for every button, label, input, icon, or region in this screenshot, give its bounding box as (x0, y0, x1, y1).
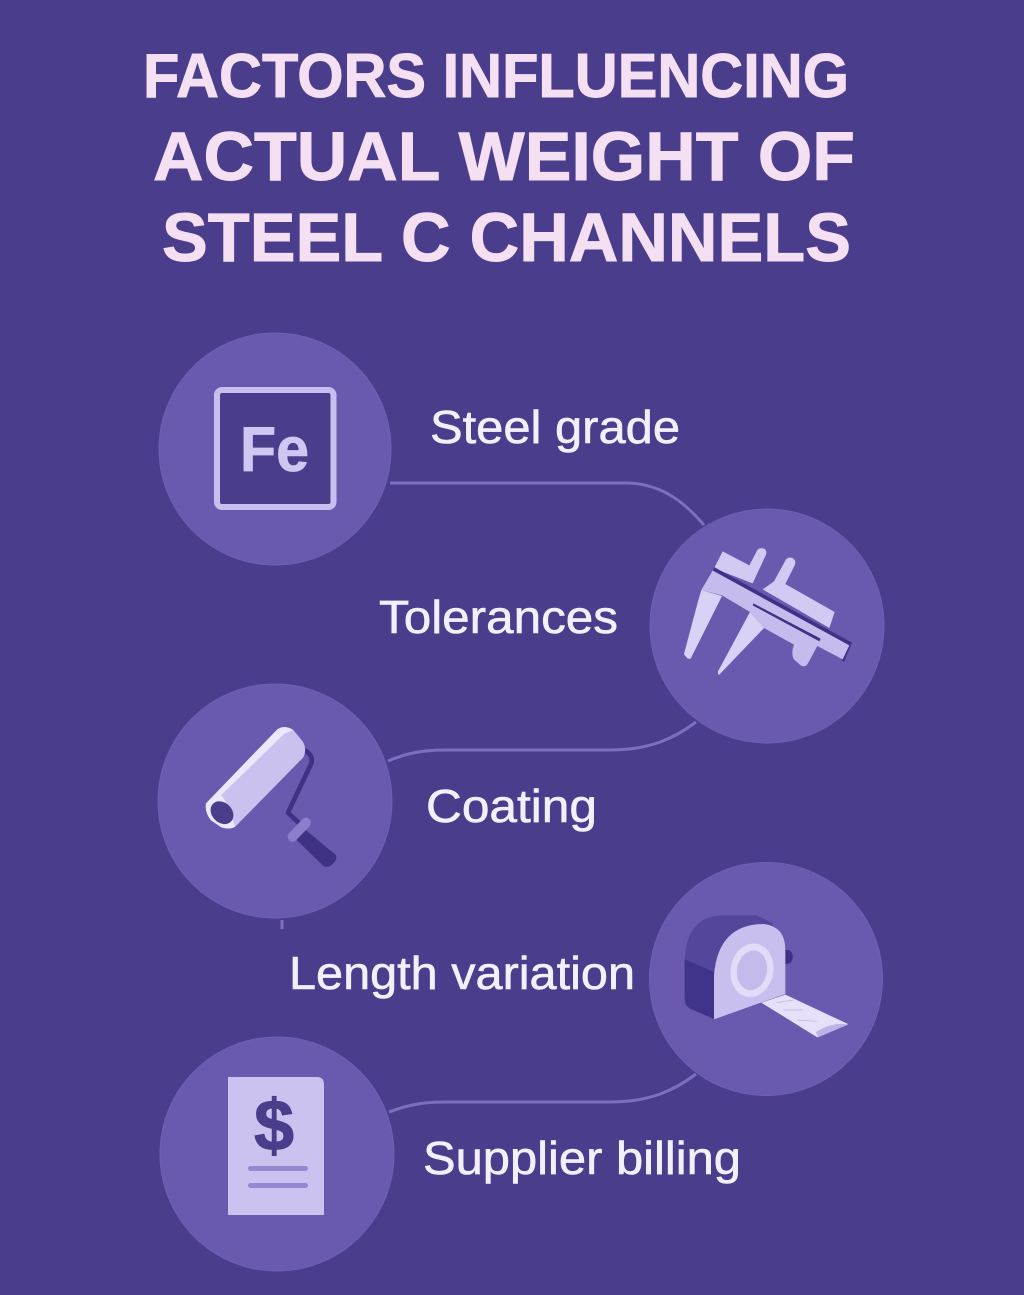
panel: tolerances (379, 509, 884, 743)
label: supplier billing: Supplier billing (423, 1132, 741, 1184)
circle: steel grade (159, 333, 391, 565)
title: ACTUAL WEIGHT OF (153, 118, 855, 195)
title: FACTORS INFLUENCING (143, 42, 849, 111)
panel: coating (158, 684, 597, 918)
circle: length variation (650, 862, 882, 1096)
label: length variation: Length variation (289, 947, 635, 999)
icon: paint roller (206, 727, 336, 867)
panel: length variation (289, 862, 882, 1096)
icon: Fe element box: Fe (240, 415, 309, 485)
label: tolerances: Tolerances (379, 591, 618, 643)
icon: invoice document (228, 1077, 324, 1215)
connector: length variation to supplier billing (389, 1074, 696, 1112)
circle: supplier billing (160, 1037, 394, 1271)
connector: tolerances to coating (388, 722, 696, 761)
label: coating: Coating (426, 780, 597, 832)
icon: invoice document: $ (254, 1086, 294, 1166)
tick below coating circle (280, 920, 284, 929)
icon: caliper (684, 548, 852, 675)
circle: coating (158, 684, 392, 918)
panel: steel grade (159, 333, 680, 565)
label: steel grade: Steel grade (430, 401, 680, 453)
icon: tape measure (685, 915, 848, 1037)
circle: tolerances (650, 509, 884, 743)
icon: Fe element box (217, 390, 334, 507)
title (143, 42, 855, 276)
title: STEEL C CHANNELS (162, 199, 851, 276)
connector: steel grade to tolerances (390, 483, 704, 525)
panel: supplier billing (160, 1037, 741, 1271)
